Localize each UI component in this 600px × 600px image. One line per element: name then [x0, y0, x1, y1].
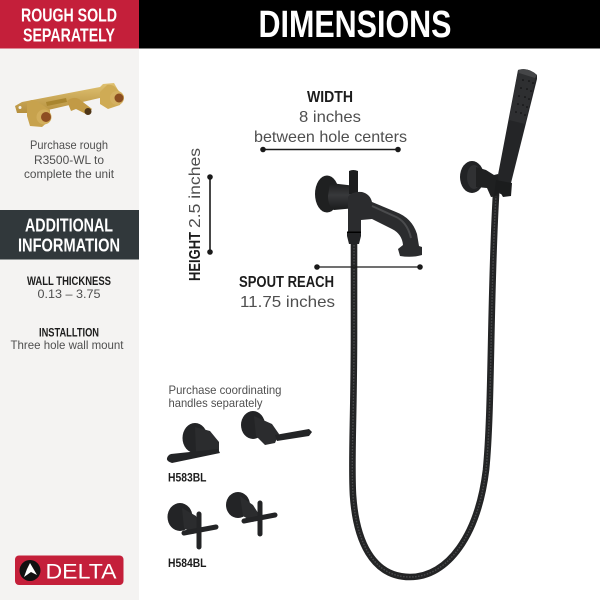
text: height dimension: HEIGHT: [187, 232, 204, 281]
arrow: height measure line: [207, 174, 213, 255]
text: purchase rough: complete the unit: [24, 167, 115, 181]
hose: hand shower hose: [352, 195, 496, 577]
text: wall thickness: 0.13 – 3.75: [38, 287, 101, 301]
text: installtion: [10, 328, 124, 352]
text: spout reach dimension: [239, 274, 335, 311]
text: height dimension: 2.5 inches: [187, 148, 204, 228]
arrow: width measure line: [260, 147, 401, 152]
logo: delta: DELTA: [46, 560, 116, 584]
icon: H583BL right lever handle: [241, 411, 312, 445]
text: spout reach dimension: 11.75 inches: [240, 294, 335, 311]
text: width dimension: 8 inches: [299, 109, 361, 126]
text: width dimension: WIDTH: [307, 89, 353, 106]
logo: delta: [15, 556, 124, 585]
text: purchase coordinating handles: Purchase coordinating: [168, 383, 282, 397]
heading: rough sold separately: ROUGH SOLD: [21, 6, 117, 26]
panel: left sidebar: [0, 0, 139, 600]
panel: additional information banner: [0, 210, 139, 260]
panel: additional information banner: INFORMATION: [18, 236, 120, 256]
text: wall thickness: [27, 276, 111, 301]
text: wall thickness: WALL THICKNESS: [27, 276, 111, 288]
text: installtion: INSTALLTION: [39, 328, 99, 340]
text: purchase rough: Purchase rough: [30, 138, 108, 152]
icon: H584BL right cross handle: [226, 492, 275, 534]
text: width dimension: between hole centers: [254, 129, 407, 146]
text: purchase rough: [24, 138, 115, 181]
text: installtion: Three hole wall mount: [10, 338, 124, 352]
label: H584BL: H584BL: [168, 558, 206, 570]
icon: brass rough-in valve: [15, 83, 124, 127]
text: height dimension: [187, 148, 204, 281]
text: spout reach dimension: SPOUT REACH: [239, 274, 334, 291]
icon: H584BL left cross handle: [168, 503, 216, 547]
icon: tub spout: [315, 170, 422, 257]
arrow: spout reach measure line: [314, 264, 423, 270]
text: purchase rough: R3500-WL to: [34, 153, 104, 167]
panel: top black header bar: [139, 0, 600, 48]
text: width dimension: [254, 89, 407, 146]
icon: hand shower and wall mount: [460, 69, 537, 197]
label: H583BL: H583BL: [168, 472, 206, 484]
heading: additional information: ADDITIONAL: [25, 216, 113, 236]
panel: rough sold separately banner: SEPARATELY: [23, 26, 115, 46]
text: purchase coordinating handles: [168, 383, 282, 410]
text: purchase coordinating handles: handles separately: [168, 396, 262, 410]
icon: H583BL left lever handle: [167, 423, 220, 463]
title: dimensions: DIMENSIONS: [258, 4, 452, 46]
panel: rough sold separately banner: [0, 0, 139, 48]
